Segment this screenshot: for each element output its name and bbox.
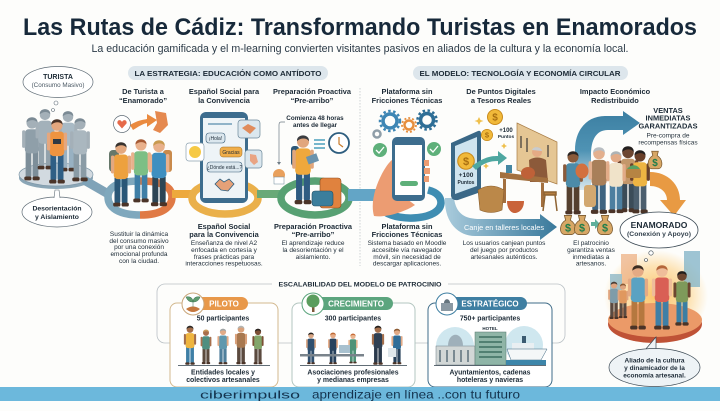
text: sustituir: por una conexión bbox=[114, 244, 164, 251]
hand back bbox=[373, 160, 415, 216]
phone: puntos bbox=[451, 131, 481, 200]
label: ventas inmediatas: INMEDIATAS bbox=[646, 114, 691, 122]
cloud: desorientacion: Desorientación bbox=[32, 206, 82, 212]
icon: coin bbox=[458, 153, 474, 169]
text: usuarios: Los usuarios canjean puntos bbox=[463, 240, 546, 247]
step headings: Plataforma sin bbox=[382, 87, 433, 96]
pill: piloto: PILOTO bbox=[209, 300, 239, 308]
panel: escalabilidad frame: ESCALABILIDAD DEL MODELO DE PATROCINIO bbox=[278, 282, 442, 288]
tagline: aprendizaje en línea ..con tu futuro bbox=[312, 388, 520, 402]
note: comienza 48 horas bbox=[277, 115, 344, 165]
ring 2 bbox=[192, 182, 258, 214]
arrow: orange curve bbox=[650, 172, 686, 216]
bubble: donde: ¿Dónde está...? bbox=[207, 165, 243, 171]
label: ventas inmediatas: VENTAS bbox=[653, 106, 683, 115]
building: hotel: HOTEL bbox=[482, 326, 498, 331]
cloud: turista: TURISTA bbox=[43, 74, 73, 81]
pot bbox=[576, 164, 588, 178]
text: sustituir: emocional profunda bbox=[110, 251, 168, 258]
cafe people bbox=[608, 282, 620, 319]
card: estrategico: hoteleras y navieras bbox=[457, 377, 523, 384]
section pill: modelo bbox=[413, 66, 628, 80]
panel: plataforma icons bbox=[373, 110, 441, 216]
step headings: Español Social para bbox=[189, 87, 260, 96]
basket bbox=[626, 169, 641, 178]
path: journey rings bbox=[19, 163, 441, 218]
step headings: De Puntos Digitales bbox=[466, 87, 536, 96]
text: preparacion: Preparación Proactiva bbox=[274, 222, 353, 231]
icons: heart to hand bbox=[114, 111, 168, 133]
count: 50 participantes bbox=[197, 316, 249, 322]
card: estrategico bbox=[428, 293, 552, 387]
bubble: aliado: economía artesanal. bbox=[623, 372, 686, 380]
text: espanol social bbox=[185, 222, 263, 268]
card: crecimiento bbox=[292, 293, 415, 387]
subtitle: La educación gamificada y el m-learning convierten visitantes pasivos en aliados de la cultura y la economía local. bbox=[92, 43, 628, 55]
icon: money bag top bbox=[648, 151, 662, 169]
text: patrocinio: artesanos. bbox=[576, 260, 606, 268]
icon: waving hand bubble bbox=[245, 150, 262, 168]
text: sustituir bbox=[109, 231, 169, 265]
icon: checklist bbox=[314, 140, 325, 148]
icon: tree bbox=[302, 293, 324, 315]
glow bbox=[604, 250, 708, 342]
fingers bbox=[424, 160, 430, 182]
text: patrocinio: El patrocinio bbox=[573, 240, 609, 247]
text: preparacion: aislamiento. bbox=[296, 254, 331, 261]
text: espanol social: frases prácticas para bbox=[194, 254, 255, 261]
text: usuarios: del juego por productos bbox=[470, 247, 539, 254]
label: ventas inmediatas bbox=[638, 106, 698, 146]
basket bbox=[478, 186, 504, 212]
count: 750+ participantes bbox=[460, 316, 520, 322]
icon: mail bbox=[273, 169, 285, 184]
icons: gold coins: Puntos bbox=[498, 134, 514, 140]
phone bbox=[392, 137, 425, 201]
text: preparacion: “Pre-arribo” bbox=[292, 230, 335, 239]
stool bbox=[543, 192, 557, 211]
label: ventas inmediatas: Pre-compra de bbox=[646, 132, 690, 140]
label: puntos: Puntos bbox=[458, 180, 475, 186]
group: travellers on ring 1 bbox=[109, 139, 172, 207]
band 2 bbox=[257, 190, 283, 198]
text: sustituir: Sustituir la dinámica bbox=[110, 231, 168, 238]
label: ventas inmediatas: recompensas físicas bbox=[638, 140, 698, 146]
figure: preparing traveller bbox=[291, 133, 349, 208]
ring 4 bbox=[385, 190, 441, 218]
ring 3 bbox=[281, 181, 349, 215]
arrow: canje en talleres locales: Canje en talleres locales bbox=[464, 223, 544, 232]
section pill: modelo: EL MODELO: TECNOLOGÍA Y ECONOMÍA CIRCULAR bbox=[420, 69, 621, 78]
card: crecimiento: y medianas empresas bbox=[317, 377, 389, 384]
text: espanol social: interacciones respetuosas. bbox=[185, 260, 263, 268]
text: espanol social: para la Convivencia bbox=[189, 230, 260, 239]
cloud: desorientacion bbox=[22, 190, 92, 227]
text: patrocinio: garantiza ventas bbox=[567, 247, 616, 254]
step headings: Preparación Proactiva bbox=[273, 87, 352, 96]
step headings: “Enamorado” bbox=[119, 96, 167, 105]
panel: turista crowd bbox=[22, 66, 93, 184]
panel: artisan workshop bbox=[478, 123, 557, 213]
table bbox=[500, 172, 548, 207]
section pill: estrategia bbox=[128, 66, 328, 80]
text: plataforma: descargar aplicaciones. bbox=[373, 260, 441, 268]
bubble: enamorado: (Conexión y Apoyo) bbox=[627, 231, 691, 238]
text: sustituir: del consumo masivo bbox=[109, 238, 169, 245]
arrow: green points bbox=[472, 151, 507, 170]
label: Ayuntamientos, cadenas bbox=[450, 370, 531, 376]
pill: estrategico: ESTRATÉGICO bbox=[461, 300, 519, 308]
panel: escalabilidad frame bbox=[157, 279, 565, 343]
connector to first ring bbox=[84, 180, 110, 195]
pot bbox=[521, 167, 535, 179]
text: plataforma: móvil, sin necesidad de bbox=[373, 254, 441, 261]
label: Entidades locales y bbox=[191, 370, 255, 376]
text: sustituir: con la ciudad. bbox=[119, 258, 159, 265]
bubble: enamorado: ENAMORADO bbox=[631, 220, 688, 230]
text: espanol social: Enseñanza de nivel A2 bbox=[191, 240, 257, 247]
bubble: gracias: Gracias bbox=[222, 150, 240, 156]
icon: clock bbox=[329, 133, 349, 153]
step headings: Impacto Económico bbox=[580, 87, 651, 96]
text: plataforma: Fricciones Técnicas bbox=[372, 230, 442, 239]
band 1 bbox=[172, 190, 194, 198]
divider between sections bbox=[359, 88, 361, 266]
text: usuarios bbox=[463, 240, 546, 261]
footer banner bbox=[0, 387, 720, 402]
icons: gold coins bbox=[474, 110, 514, 169]
icon: city hall bbox=[436, 293, 458, 315]
pill: crecimiento: CRECIMIENTO bbox=[328, 300, 384, 308]
card: piloto: colectivos artesanales bbox=[186, 377, 260, 384]
label: puntos bbox=[458, 172, 475, 186]
platform bbox=[608, 303, 702, 343]
bubble: aliado bbox=[609, 337, 700, 386]
group: artisans bbox=[563, 146, 650, 214]
step headings: Redistribuido bbox=[591, 96, 639, 105]
title: Las Rutas de Cádiz: Transformando Turistas en Enamorados bbox=[23, 14, 697, 41]
bubble: hola: ¡Hola! bbox=[209, 136, 222, 142]
ship bbox=[506, 336, 547, 365]
step headings: “Pre-arribo” bbox=[291, 96, 334, 105]
gears bbox=[374, 110, 436, 138]
business people bbox=[300, 326, 407, 366]
friends bbox=[628, 265, 648, 330]
arrow: orange bbox=[130, 114, 157, 130]
cloud: desorientacion: y Aislamiento bbox=[35, 214, 79, 221]
people bbox=[178, 326, 270, 366]
bowl bbox=[507, 201, 524, 213]
label: Asociaciones profesionales bbox=[307, 370, 399, 376]
phone: chat bbox=[200, 112, 248, 203]
icons: gold coins: +100 bbox=[499, 128, 513, 134]
bubble: aliado: y dinamicador de la bbox=[624, 365, 685, 372]
text: plataforma bbox=[368, 222, 447, 268]
sky bbox=[505, 326, 543, 364]
cloud: turista: (Consumo Masivo) bbox=[32, 82, 84, 89]
band 3 bbox=[348, 189, 376, 201]
icon: handshake bbox=[215, 179, 234, 191]
cup bbox=[506, 165, 512, 173]
step headings: Fricciones Técnicas bbox=[372, 96, 442, 105]
step headings: a Tesoros Reales bbox=[471, 96, 531, 105]
arrow: canje en talleres locales bbox=[445, 198, 557, 240]
icon: handshake bbox=[153, 111, 168, 133]
note: comienza 48 horas: Comienza 48 horas bbox=[286, 115, 344, 122]
text: plataforma: Plataforma sin bbox=[382, 222, 433, 231]
text: espanol social: enfocada en cortesía y bbox=[191, 247, 258, 254]
sacks bbox=[584, 185, 596, 207]
panel: enamorado scene bbox=[604, 250, 708, 343]
artisan bbox=[529, 147, 548, 182]
pegboard bbox=[517, 123, 557, 184]
building: city hall bbox=[436, 335, 475, 365]
checks bbox=[373, 142, 441, 157]
icon: handshake bubble bbox=[238, 120, 260, 138]
icons: money bags bbox=[560, 215, 613, 235]
text: plataforma: Sistema basado en Moodle bbox=[368, 240, 447, 247]
step headings: De Turista a bbox=[122, 87, 165, 96]
icon: heart bubble bbox=[114, 116, 130, 132]
text: usuarios: artesanales auténticos. bbox=[471, 254, 538, 261]
step headings bbox=[119, 87, 651, 105]
icon: seedling bbox=[182, 293, 204, 315]
bubble: enamorado bbox=[620, 212, 698, 262]
arrow: big blue curve bbox=[575, 111, 640, 190]
text: plataforma: accesible vía navegador bbox=[372, 247, 443, 254]
step headings: la Convivencia bbox=[198, 96, 251, 105]
label: ventas inmediatas: GARANTIZADAS bbox=[638, 122, 698, 130]
count: 300 participantes bbox=[325, 316, 381, 322]
cloud: turista bbox=[23, 66, 93, 112]
luggage bbox=[312, 178, 341, 208]
crowd platform bbox=[19, 163, 93, 189]
text: espanol social: Español Social bbox=[198, 222, 250, 231]
label: puntos: +100 bbox=[459, 172, 474, 179]
text: patrocinio: inmediatas a bbox=[573, 254, 610, 261]
bubble: aliado: Aliado de la cultura bbox=[625, 358, 685, 364]
note: comienza 48 horas: antes de llegar bbox=[293, 122, 338, 129]
text: preparacion bbox=[274, 222, 353, 261]
text: patrocinio bbox=[567, 240, 616, 268]
section pill: estrategia: LA ESTRATEGIA: EDUCACIÓN COMO ANTÍDOTO bbox=[134, 69, 322, 78]
buildings bbox=[610, 251, 700, 290]
gray tourists bbox=[22, 109, 90, 181]
text: preparacion: la desorientación y el bbox=[282, 247, 344, 254]
central tourist bbox=[47, 119, 67, 184]
brand: ciberimpulso bbox=[200, 390, 300, 402]
icon: smile bubble bbox=[186, 143, 204, 161]
ring 1 bbox=[108, 181, 172, 215]
card: piloto bbox=[170, 293, 278, 387]
text: preparacion: El aprendizaje reduce bbox=[282, 240, 345, 247]
